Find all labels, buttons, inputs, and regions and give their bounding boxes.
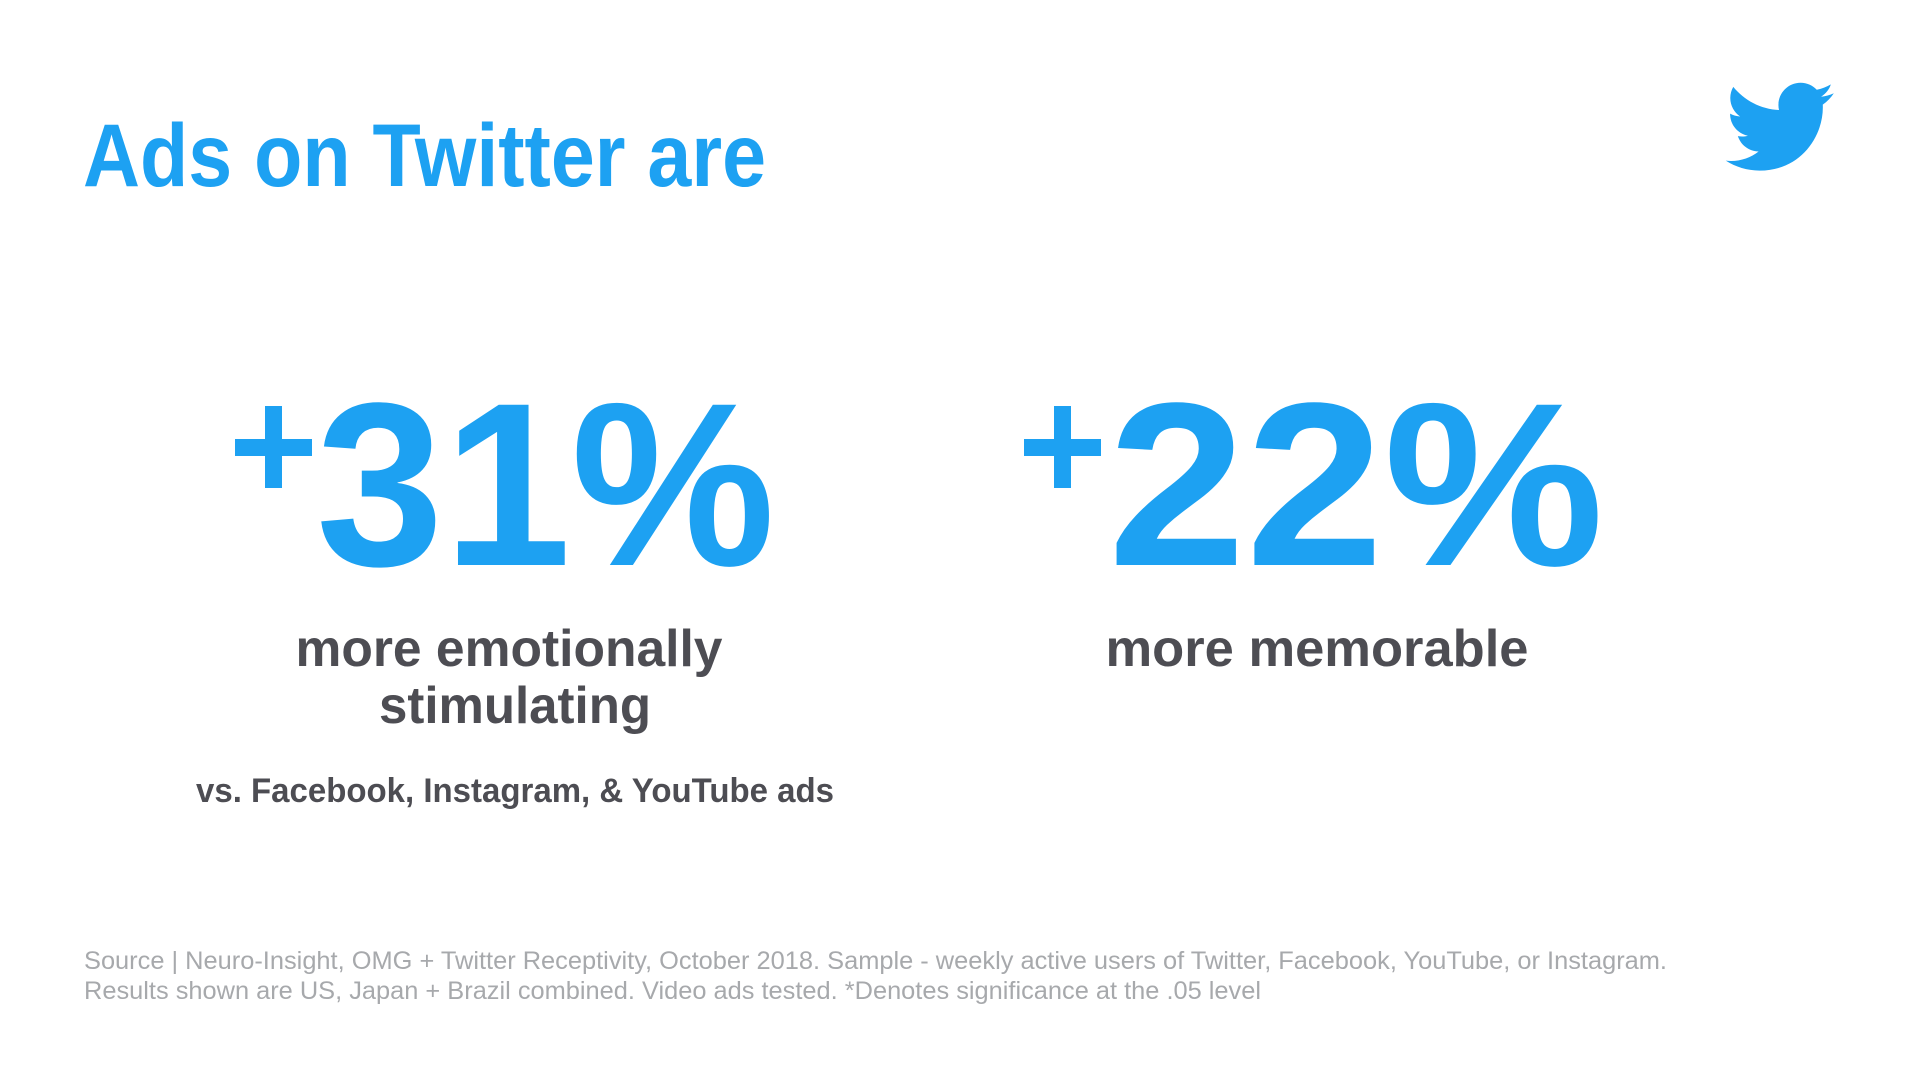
icon: twitter bird <box>1726 83 1834 171</box>
stat: +22%: 22% <box>1108 355 1604 615</box>
plus sign <box>1024 406 1101 488</box>
footer source: Source | Neuro-Insight, OMG + Twitter Receptivity, October 2018. Sample - weekly active users of Twitter, Facebook, YouTube, or Instagram. <box>84 947 1667 975</box>
footer source <box>84 947 1667 1005</box>
stat: +31%: 31% <box>316 355 775 615</box>
title: Ads on Twitter are <box>83 105 766 205</box>
label: more memorable: more memorable <box>1106 620 1528 678</box>
footer source: Results shown are US, Japan + Brazil combined. Video ads tested. *Denotes significance at the .05 level <box>84 977 1261 1005</box>
label: more emotionally stimulating: more emotionally <box>296 620 723 678</box>
comparison note: vs. Facebook, Instagram, & YouTube ads <box>196 772 834 810</box>
label: more emotionally stimulating: stimulating <box>379 677 651 735</box>
plus sign <box>235 406 312 488</box>
label: more emotionally stimulating <box>296 620 723 735</box>
